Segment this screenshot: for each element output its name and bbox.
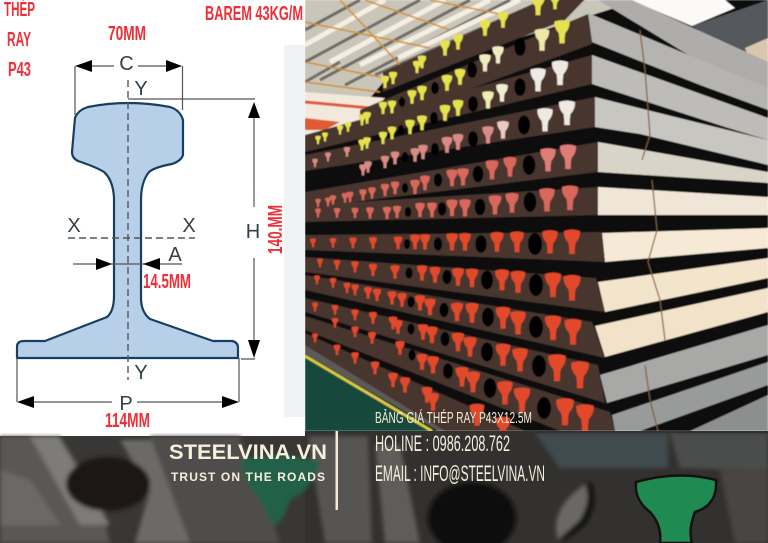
white panel base	[0, 431, 305, 436]
hotline: HOLINE : 0986.208.762	[375, 431, 510, 456]
label: unit weight: BAREM 43KG/M	[205, 3, 303, 25]
rail profile	[17, 103, 238, 358]
axis letters	[67, 78, 196, 384]
dimension P: P	[119, 393, 133, 415]
coloured rail heads: yellow rows	[315, 0, 570, 150]
label: head width: 70MM	[108, 23, 146, 45]
pink rail heads	[312, 121, 509, 175]
title: THÉP RAY P43	[4, 0, 35, 81]
side strip	[284, 45, 305, 417]
brand slogan: TRUST ON THE ROADS	[171, 470, 325, 484]
dimension H	[128, 99, 260, 359]
title: THÉP RAY P43: P43	[8, 59, 31, 81]
dimension P	[17, 358, 239, 415]
rail side faces	[588, 0, 768, 431]
label: base width: 114MM	[105, 410, 150, 432]
salmon rail heads	[315, 144, 578, 219]
axis letters: X	[67, 215, 81, 237]
axis letters: Y	[134, 362, 148, 384]
axis letters: X	[182, 215, 196, 237]
price table caption: BẢNG GIÁ THÉP RAY P43X12.5M	[375, 408, 532, 427]
label: height: 140.MM	[265, 205, 287, 254]
dimension C: C	[119, 53, 134, 75]
whitish rail heads	[530, 60, 575, 131]
floor	[305, 345, 450, 431]
binding wires	[640, 30, 665, 431]
footer divider	[336, 431, 338, 510]
photo: stacked steel rails	[305, 0, 768, 439]
green rail head	[636, 475, 716, 543]
dimension A: A	[168, 244, 182, 266]
brand name: STEELVINA.VN	[169, 441, 327, 464]
centre lines	[68, 80, 195, 380]
footer band with darkened rail photo	[0, 431, 768, 543]
footer photo shapes	[0, 433, 768, 543]
email: EMAIL : INFO@STEELVINA.VN	[375, 461, 545, 486]
label: web thickness: 14.5MM	[143, 271, 191, 293]
bright skylight and wall	[630, 0, 768, 72]
dimension H: H	[246, 221, 260, 243]
rail cross-section diagram	[17, 53, 260, 415]
dimension C	[75, 53, 182, 115]
axis letters: Y	[134, 78, 148, 100]
red rail heads	[310, 230, 594, 439]
dark gaps between rail ends	[398, 38, 551, 419]
title: THÉP RAY P43: RAY	[7, 29, 31, 51]
dimension A	[73, 244, 182, 270]
rail end faces	[305, 0, 615, 431]
warehouse ceiling	[305, 0, 640, 140]
